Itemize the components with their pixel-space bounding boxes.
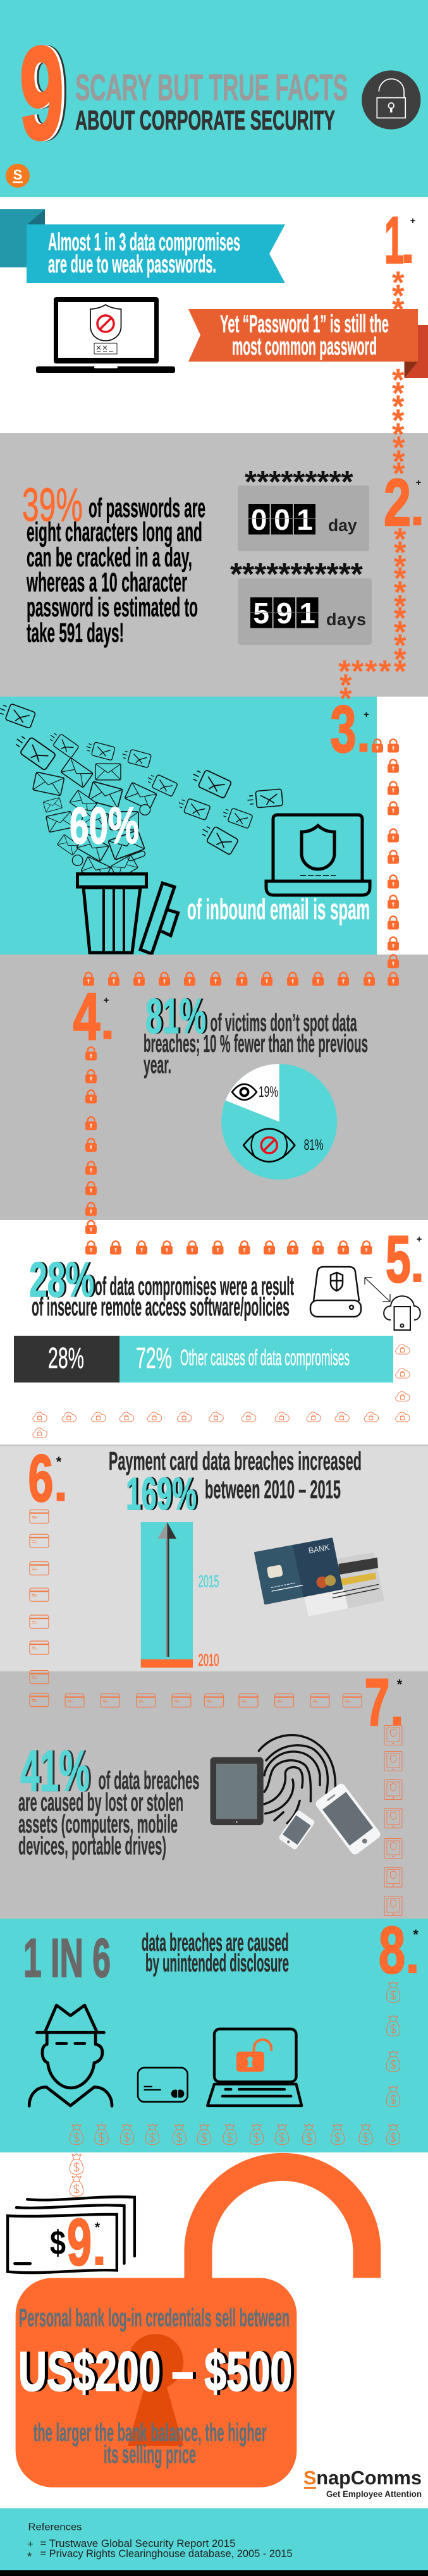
icon: SnapComms round logo: S bbox=[13, 167, 22, 183]
stat: payment card breaches 169%: 169% bbox=[126, 1469, 197, 1520]
icon: laptop with open lock bbox=[207, 2029, 302, 2106]
heading number 8: * bbox=[413, 1927, 419, 1943]
stat: 81% of victims: 81% bbox=[145, 988, 206, 1044]
icon: flying spam envelopes bbox=[0, 700, 283, 882]
panel: references bbox=[0, 2508, 428, 2570]
teal ribbon: Almost 1 in 3 data compromises bbox=[48, 229, 240, 256]
icon: credit card bbox=[138, 2068, 188, 2102]
heading number 3: + bbox=[364, 709, 369, 720]
panel: fact 3 bbox=[0, 693, 428, 955]
counter: eight characters, one day: 0 bbox=[274, 503, 290, 536]
bar chart: 2010 to 2015 growth arrow: 2010 bbox=[199, 1651, 219, 1670]
stat: 81% of victims bbox=[144, 988, 368, 1078]
icon: cloud and phone bbox=[384, 1296, 420, 1330]
icon: giant open padlock bbox=[16, 2167, 367, 2487]
logo: SnapComms: Get Employee Attention bbox=[326, 2489, 422, 2499]
stat: 41% of data breaches: 41% bbox=[22, 1739, 92, 1804]
icon: two-way arrow bbox=[365, 1278, 390, 1302]
panel: fact 7 bbox=[0, 1666, 428, 1919]
heading number 6: * bbox=[56, 1454, 62, 1470]
counter: eight characters, one day: 1 bbox=[297, 503, 313, 536]
reference: Privacy Rights Clearinghouse: * bbox=[27, 2551, 32, 2564]
stat: 81% of victims: year. bbox=[144, 1052, 171, 1078]
heading number 7: * bbox=[397, 1676, 403, 1692]
icon: SnapComms round logo bbox=[6, 164, 30, 188]
big numeral 9: 9 bbox=[22, 20, 66, 167]
heading number 2: . bbox=[410, 475, 425, 538]
icon: bank card: BANK bbox=[308, 1542, 331, 1556]
icon: trash can with lid bbox=[77, 874, 178, 954]
stat: 28% of data compromises bbox=[29, 1252, 294, 1321]
heading number 9: . bbox=[91, 2214, 107, 2278]
bar chart: 2010 to 2015 growth arrow: 2015 bbox=[199, 1572, 219, 1590]
stat: 39% of passwords: can be cracked in a day, bbox=[27, 542, 192, 573]
heading number 7: 7 bbox=[364, 1666, 389, 1740]
stat: 39% of passwords: password is estimated to bbox=[27, 592, 198, 623]
icon: laptop with shield bbox=[266, 815, 370, 895]
panel: fact 1 bbox=[0, 197, 428, 433]
heading number 7: . bbox=[389, 1675, 405, 1738]
panel: fact 2 bbox=[0, 433, 428, 697]
heading number 1: 1 bbox=[384, 204, 404, 278]
heading number 6: . bbox=[53, 1450, 69, 1513]
counter: ten characters, 591 days bbox=[230, 558, 372, 645]
reference: Trustwave: = Trustwave Global Security Report 2015 bbox=[40, 2538, 235, 2549]
heading number 8: 8 bbox=[379, 1914, 405, 1987]
logo: SnapComms bbox=[303, 2467, 422, 2499]
counter: eight characters, one day bbox=[238, 465, 369, 551]
trail: cloud locks connecting facts 5 and 6 bbox=[33, 1345, 410, 1438]
stat: 39% of passwords: of passwords are bbox=[89, 493, 205, 523]
big numeral 9: 9 bbox=[20, 20, 64, 167]
teal ribbon: are due to weak passwords. bbox=[48, 251, 216, 278]
stat: 28% of data compromises: 28% bbox=[31, 1252, 96, 1307]
heading number 9: * bbox=[95, 2219, 101, 2235]
stat: 1 in 6: 1 IN 6 bbox=[23, 1928, 111, 1989]
pie chart: 81% versus 19%: 19% bbox=[259, 1084, 278, 1101]
reference: Trustwave: + bbox=[27, 2538, 34, 2550]
heading number 6: 6 bbox=[28, 1441, 53, 1516]
heading number 1: . bbox=[400, 212, 416, 276]
heading number 8: . bbox=[405, 1922, 420, 1986]
heading number 3: . bbox=[355, 702, 372, 765]
stat: 39% of passwords: take 591 days! bbox=[27, 618, 124, 649]
big numeral 9: 9 bbox=[24, 20, 68, 167]
orange ribbon bbox=[188, 309, 428, 378]
stat: 41% of data breaches: assets (computers, mobile bbox=[18, 1810, 178, 1838]
counter: ten characters, 591 days: days bbox=[326, 610, 366, 629]
heading number 4: 4 bbox=[73, 980, 100, 1054]
references heading: References bbox=[28, 2522, 82, 2532]
heading number 2: + bbox=[416, 477, 422, 488]
stat: price range: US$200 – $500 bbox=[21, 2340, 295, 2402]
stat: 39% of passwords: 39% bbox=[22, 479, 83, 531]
reference: Privacy Rights Clearinghouse: = Privacy Rights Clearinghouse database, 2005 - 2015 bbox=[40, 2548, 292, 2560]
text: selling price note bbox=[34, 2419, 267, 2469]
bar chart: 2010 to 2015 growth arrow bbox=[141, 1522, 219, 1670]
stat: payment card breaches 169% bbox=[109, 1446, 362, 1520]
stat: 39% of passwords: eight characters long and bbox=[27, 517, 202, 547]
trail: padlocks connecting facts 3 to 5 bbox=[83, 740, 399, 1254]
panel: fact 5 bbox=[0, 1220, 428, 1444]
icon: laptop with blocked shield bbox=[36, 297, 175, 373]
heading number 9: 9 bbox=[67, 2206, 92, 2280]
panel: fact 6 bbox=[0, 1441, 428, 1671]
heading number 4: . bbox=[100, 989, 116, 1052]
stat: 41% of data breaches: 41% bbox=[20, 1739, 90, 1804]
heading number 2: 2 bbox=[384, 466, 411, 540]
heading number 1: + bbox=[410, 216, 416, 226]
icon: secure drive bbox=[310, 1267, 361, 1317]
stat: 81% of victims: 81% bbox=[147, 988, 208, 1044]
heading number 9: $ bbox=[50, 2224, 66, 2262]
heading number 5: 5 bbox=[386, 1223, 411, 1297]
counter: eight characters, one day: ********* bbox=[245, 465, 354, 499]
counter: ten characters, 591 days: 5 bbox=[253, 597, 269, 630]
trail: asterisks connecting facts 1 to 3: **************************** bbox=[338, 265, 407, 716]
stat: 41% of data breaches: are caused by lost or stolen bbox=[18, 1789, 183, 1817]
stat: 39% of passwords: whereas a 10 character bbox=[26, 568, 187, 598]
stat: price range: US$200 – $500 bbox=[18, 2340, 292, 2402]
counter: ten characters, 591 days: *********** bbox=[230, 558, 364, 592]
heading number 5: . bbox=[410, 1231, 425, 1295]
panel: header bbox=[0, 0, 428, 197]
icon: hooded thief bbox=[29, 2005, 112, 2106]
logo: SnapComms: SnapComms bbox=[303, 2467, 422, 2489]
icon: open padlock badge bbox=[362, 70, 420, 130]
stat: 41% of data breaches: devices, portable drives) bbox=[18, 1832, 166, 1860]
heading number 5: + bbox=[417, 1234, 422, 1245]
counter: ten characters, 591 days: 9 bbox=[276, 597, 293, 630]
stat: 41% of data breaches bbox=[18, 1739, 200, 1860]
icon: bank card bbox=[255, 1539, 384, 1616]
text: selling price note: its selling price bbox=[104, 2441, 196, 2469]
stat: 41% of data breaches: of data breaches bbox=[99, 1767, 200, 1795]
trail: money bags connecting facts 8 and 9 bbox=[70, 1982, 400, 2196]
pie chart: 81% versus 19%: 81% bbox=[304, 1137, 324, 1154]
footer bar bbox=[0, 2570, 428, 2576]
icon: stack of bank notes bbox=[8, 2197, 135, 2273]
bar chart: 28% versus 72%: 72% bbox=[136, 1341, 172, 1374]
counter: eight characters, one day: day bbox=[328, 516, 357, 535]
stat: 39% of passwords bbox=[22, 479, 205, 649]
panel: fact 9 bbox=[0, 2152, 428, 2508]
stat: 28% of data compromises: 28% bbox=[29, 1252, 94, 1307]
stat: payment card breaches 169%: 169% bbox=[128, 1469, 199, 1520]
panel: fact 8 bbox=[0, 1914, 428, 2152]
counter: eight characters, one day: 0 bbox=[251, 503, 267, 536]
trail: payment cards connecting facts 6 and 7 bbox=[30, 1510, 362, 1707]
panel: fact 4 bbox=[0, 955, 428, 1220]
caption: unintended disclosure bbox=[142, 1929, 289, 1977]
pie chart: 81% versus 19% bbox=[221, 1064, 337, 1180]
heading number 3: 3 bbox=[330, 693, 357, 766]
reference: Privacy Rights Clearinghouse bbox=[27, 2548, 292, 2564]
icon: fingerprint and devices bbox=[210, 1735, 382, 1856]
trail: tablets below fact 7 bbox=[384, 1726, 402, 1915]
stat: 60%: 60% bbox=[70, 797, 139, 855]
bar chart: 28% versus 72% bbox=[14, 1336, 393, 1383]
heading number 4: + bbox=[104, 995, 109, 1006]
counter: ten characters, 591 days: 1 bbox=[299, 597, 315, 630]
big numeral 9 bbox=[20, 20, 68, 167]
heading number 9 bbox=[50, 2206, 107, 2280]
bar chart: 28% versus 72%: 28% bbox=[48, 1341, 84, 1374]
teal ribbon bbox=[0, 209, 285, 283]
